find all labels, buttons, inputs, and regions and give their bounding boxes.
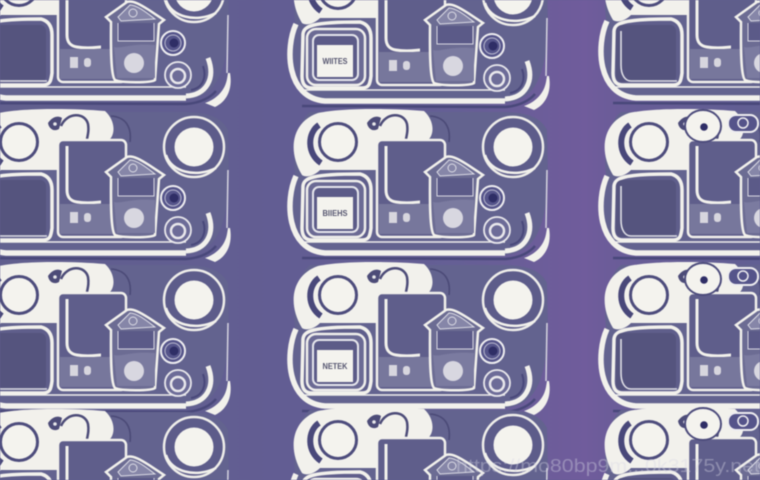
device tile: left row 2 (0, 109, 231, 262)
device tile: right row 4 (601, 407, 760, 480)
device tile: center row 2 (290, 109, 550, 262)
left column devices (0, 0, 231, 480)
device tile: right row 1 (601, 0, 760, 107)
screen label: center row 2: BIIEHS (322, 209, 348, 218)
device tile: left row 4 (0, 409, 231, 480)
device tile: center row 4 (290, 407, 550, 480)
eye icon: right row 4 (685, 408, 758, 440)
right column devices (601, 0, 760, 480)
device tile: center row 3 (290, 262, 550, 415)
eye icon: right row 3 (685, 263, 758, 295)
eye icon: right row 2 (685, 110, 758, 142)
device tile: right row 2 (601, 109, 760, 262)
watermark: https://mo80bp9m...0k3175y.net (456, 456, 760, 476)
screen label: center row 3: NETEK (322, 362, 348, 371)
device tile: left row 1 (0, 0, 231, 107)
device tile: right row 3 (601, 262, 760, 415)
device tile: left row 3 (0, 262, 231, 415)
screen label: center row 1: WIITES (322, 57, 348, 66)
center column devices (290, 0, 550, 480)
device tile: center row 1 (290, 0, 550, 110)
